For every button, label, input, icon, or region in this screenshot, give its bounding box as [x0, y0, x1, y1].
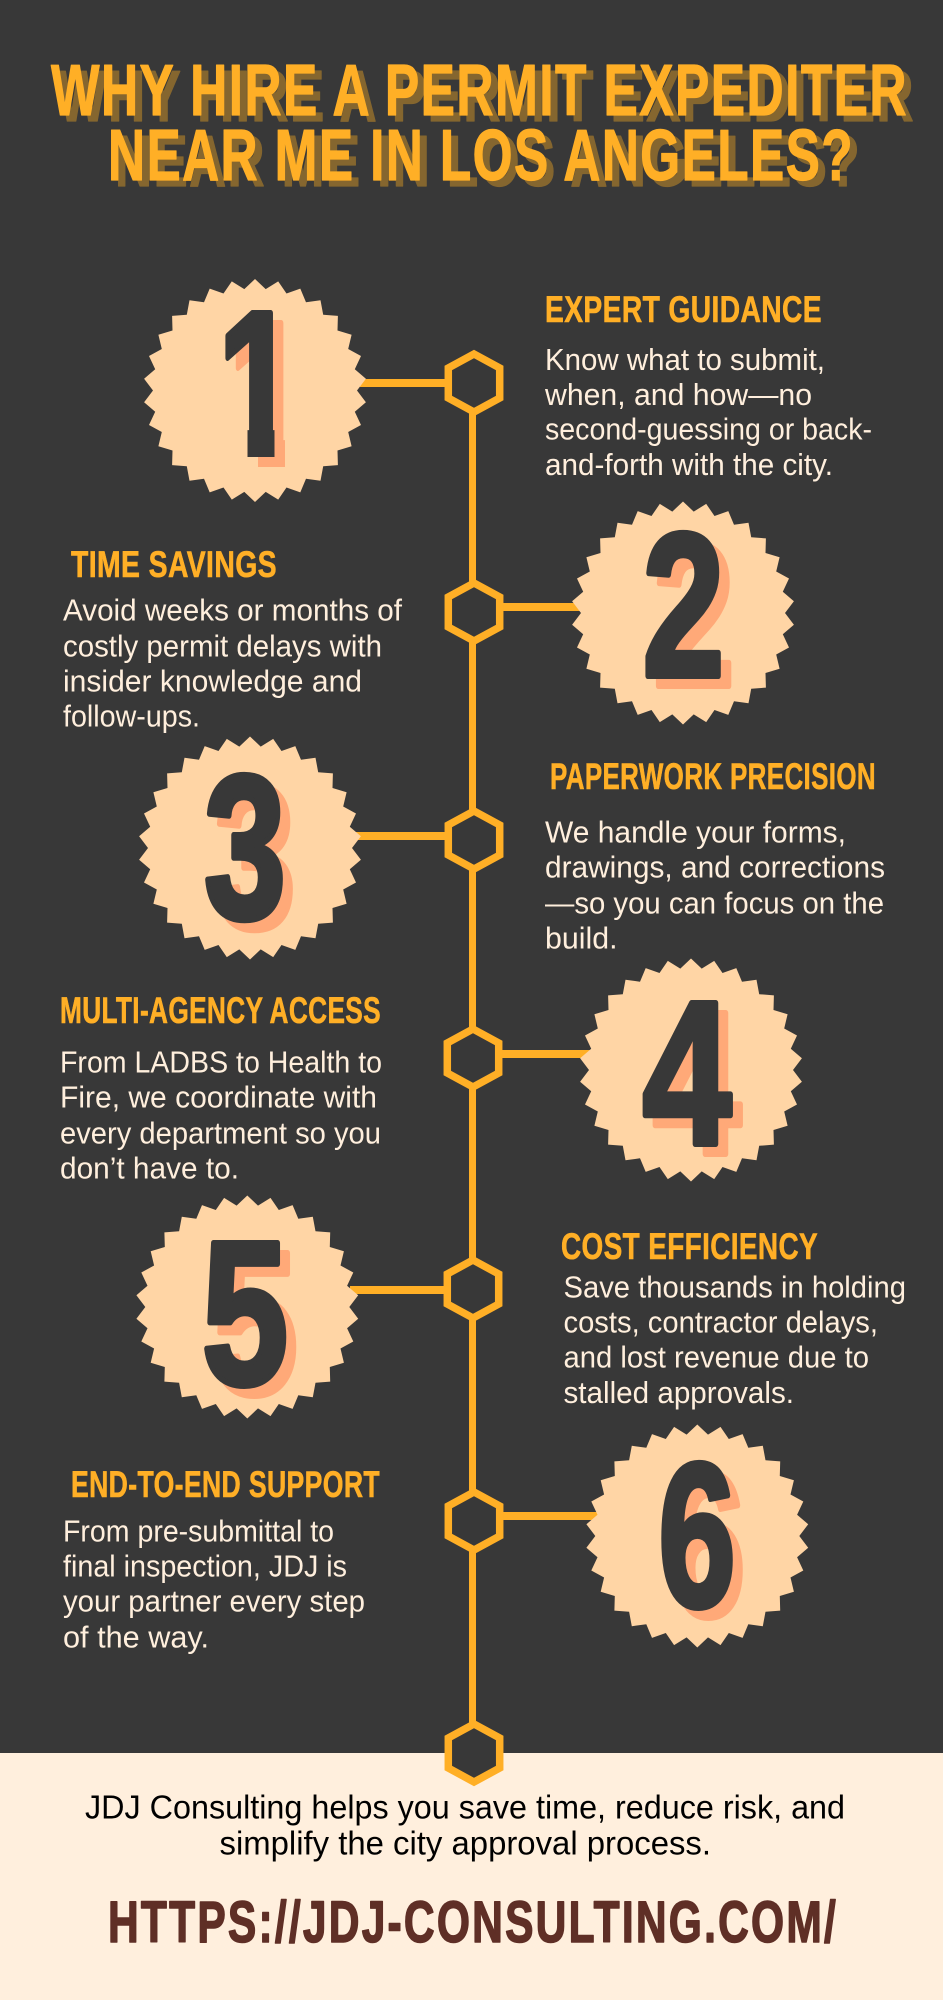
- text block: paperwork precision: [545, 756, 885, 955]
- body: your partner every step: [63, 1584, 365, 1619]
- body: Fire, we coordinate with: [60, 1080, 377, 1115]
- body: build.: [545, 920, 618, 955]
- timeline node 1: [448, 354, 500, 412]
- body: Know what to submit,: [545, 342, 825, 377]
- badge 4: [580, 958, 802, 1197]
- text block: multi-agency access: [60, 990, 382, 1185]
- body: [544, 342, 872, 482]
- body: of the way.: [63, 1619, 209, 1654]
- closing statement: JDJ Consulting helps you save time, reduce risk, and: [85, 1788, 845, 1825]
- text block: end-to-end support: [63, 1464, 380, 1654]
- badge 1: 1: [228, 280, 308, 508]
- closing statement: [85, 1788, 845, 1861]
- text block: cost efficiency: [561, 1226, 906, 1410]
- body: [545, 815, 885, 955]
- badge 3: 3: [204, 732, 286, 962]
- badge 4: 4: [653, 969, 741, 1197]
- timeline node 5: [447, 1260, 499, 1318]
- connector 2: [498, 603, 583, 611]
- connector 1: [360, 379, 450, 387]
- body: We handle your forms,: [545, 815, 846, 850]
- text block: expert guidance: [544, 289, 872, 482]
- badge 1: 1: [218, 270, 298, 498]
- body: From pre-submittal to: [63, 1514, 334, 1549]
- timeline vertical line: [469, 400, 476, 1730]
- closing statement: simplify the city approval process.: [220, 1824, 711, 1861]
- badge 3: 3: [214, 742, 296, 972]
- connector 5: [350, 1286, 450, 1294]
- body: don’t have to.: [60, 1150, 239, 1185]
- body: every department so you: [60, 1115, 381, 1150]
- body: drawings, and corrections: [545, 850, 885, 884]
- connector 6: [498, 1512, 598, 1520]
- badge 6: 6: [658, 1421, 736, 1650]
- body: [60, 1045, 382, 1185]
- body: costly permit delays with: [63, 629, 382, 664]
- bottom panel background: [0, 1753, 943, 2000]
- timeline node 2: [448, 583, 500, 641]
- badge 4: 4: [643, 959, 731, 1187]
- body: follow-ups.: [63, 699, 200, 734]
- body: From LADBS to Health to: [60, 1045, 382, 1080]
- body: and lost revenue due to: [564, 1340, 869, 1375]
- title: [51, 51, 915, 202]
- body: costs, contractor delays,: [564, 1305, 878, 1340]
- body: final inspection, JDJ is: [63, 1549, 347, 1584]
- heading: COST EFFICIENCY: [561, 1226, 818, 1267]
- heading: END-TO-END SUPPORT: [71, 1464, 380, 1505]
- body: stalled approvals.: [564, 1375, 794, 1410]
- body: Avoid weeks or months of: [63, 593, 402, 628]
- badge 6: 6: [668, 1431, 746, 1660]
- body: Save thousands in holding: [564, 1270, 906, 1305]
- timeline node 3: [448, 811, 500, 869]
- timeline node 6: [448, 1492, 500, 1550]
- timeline node 4: [447, 1029, 499, 1087]
- text block: time savings: [63, 544, 402, 734]
- body: and-forth with the city.: [545, 447, 833, 482]
- timeline node 7: [448, 1724, 500, 1782]
- body: [63, 1514, 365, 1654]
- badge 5: [136, 1196, 358, 1438]
- badge 2: [572, 490, 794, 730]
- badge 5: 5: [202, 1198, 288, 1428]
- body: —so you can focus on the: [545, 885, 884, 920]
- connector 3: [355, 832, 450, 840]
- badge 6: [586, 1421, 808, 1660]
- heading: EXPERT GUIDANCE: [545, 289, 822, 330]
- badge 2: 2: [642, 490, 725, 720]
- heading: TIME SAVINGS: [71, 544, 277, 585]
- badge 3: [139, 732, 361, 972]
- badge 5: 5: [212, 1208, 298, 1438]
- badge 2: 2: [653, 500, 735, 730]
- connector 4: [498, 1050, 593, 1058]
- body: insider knowledge and: [63, 664, 362, 699]
- body: second-guessing or back-: [545, 412, 872, 446]
- body: [63, 593, 402, 734]
- body: [564, 1270, 906, 1410]
- badge 1: [144, 270, 366, 508]
- body: when, and how—no: [544, 377, 812, 412]
- heading: MULTI-AGENCY ACCESS: [60, 990, 381, 1031]
